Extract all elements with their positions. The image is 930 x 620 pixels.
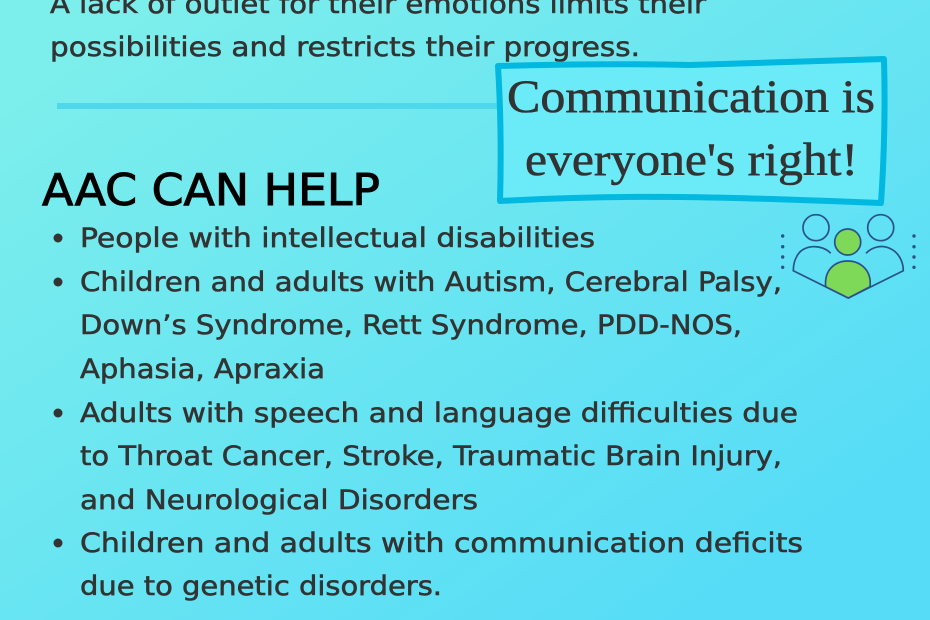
bullet: adults with speech difficulties: Adults with speech and language difficulties due [80, 398, 798, 429]
bullet: intellectual disabilities: People with intellectual disabilities [80, 223, 595, 254]
intro text block: possibilities and restricts their progress. [50, 32, 640, 63]
intro text block [50, 0, 707, 63]
bullet: communication deficits: Children and adults with communication deficits [80, 528, 803, 559]
bullet list [54, 223, 803, 602]
icon: group of people [781, 215, 916, 298]
heading: AAC CAN HELP [42, 165, 380, 216]
callout box [498, 59, 885, 203]
bullet: autism and related conditions: Aphasia, Apraxia [80, 354, 325, 385]
bullet: adults with speech difficulties [54, 398, 798, 516]
bullet: adults with speech difficulties: and Neurological Disorders [80, 485, 478, 516]
bullet: communication deficits: due to genetic disorders. [80, 571, 442, 602]
bullet: autism and related conditions: Down’s Syndrome, Rett Syndrome, PDD-NOS, [80, 310, 742, 341]
callout text: Communication is [507, 71, 875, 123]
callout: communication is everyone's right [498, 59, 885, 203]
divider line [57, 103, 499, 109]
callout: communication is everyone's right: everyone's right! [525, 134, 858, 186]
bullet: autism and related conditions [54, 267, 782, 385]
bullet: adults with speech difficulties: to Throat Cancer, Stroke, Traumatic Brain Injury, [80, 441, 782, 472]
bullet: communication deficits [54, 528, 803, 602]
bullet: autism and related conditions: Children and adults with Autism, Cerebral Palsy, [80, 267, 782, 298]
